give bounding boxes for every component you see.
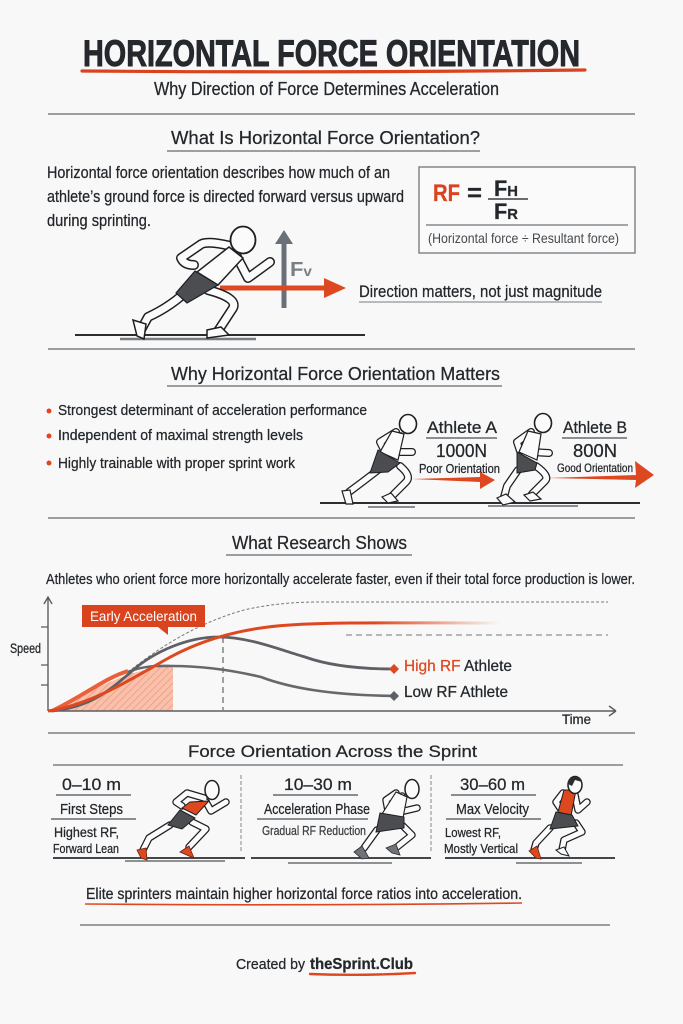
column: 10-30 m: Acceleration Phase (264, 801, 370, 818)
panel: why it matters (46, 363, 654, 507)
footer credit: Created by (236, 956, 305, 973)
runner: starting sprint (133, 226, 270, 339)
formula box: (Horizontal force ÷ Resultant force) (428, 230, 619, 246)
ground line (75, 335, 365, 339)
column: 10-30 m (251, 775, 431, 863)
chart axes (41, 597, 616, 716)
label: athlete A: 1000N (436, 441, 487, 461)
bullet list: Highly trainable with proper sprint work (58, 455, 295, 472)
column: 30-60 m: Mostly Vertical (444, 841, 518, 856)
legend: high RF athlete: High RF Athlete (404, 658, 512, 675)
heading: research: What Research Shows (232, 532, 407, 553)
column: 30-60 m (444, 775, 615, 863)
column: 30-60 m: Max Velocity (456, 801, 529, 818)
column: 0-10 m: Forward Lean (53, 842, 119, 856)
shaded area: early acceleration (52, 666, 173, 711)
marker: high RF (389, 664, 399, 674)
panel: what is horizontal force orientation (47, 127, 635, 339)
column: 0-10 m: Highest RF, (54, 824, 119, 840)
line chart: speed over time (10, 597, 616, 727)
label: athlete A: Poor Orientation (419, 462, 500, 476)
column: 30-60 m: 30–60 m (460, 775, 525, 794)
heading: what is: What Is Horizontal Force Orientation? (171, 127, 480, 148)
formula box: RF (433, 180, 460, 207)
ground line: athletes (320, 503, 640, 507)
formula box: FH (494, 176, 518, 201)
column: 10-30 m: 10–30 m (284, 775, 352, 794)
column: 0-10 m (51, 775, 245, 861)
column: 0-10 m: First Steps (60, 801, 123, 818)
callout: early acceleration (82, 605, 205, 635)
icon: athlete A force arrow (412, 472, 495, 489)
panel: research (10, 532, 635, 727)
label: athlete B: Athlete B (563, 418, 627, 437)
curve: high RF red (48, 623, 500, 711)
column: 30-60 m: Lowest RF, (445, 825, 501, 840)
text block: definition: during sprinting. (47, 212, 151, 230)
bullet list (46, 402, 367, 472)
icon: athlete B force arrow (548, 461, 654, 488)
formula box (419, 167, 635, 253)
column: 0-10 m: 0–10 m (62, 775, 121, 794)
legend: low RF athlete: Low RF Athlete (404, 684, 508, 701)
icon: vertical force arrow (275, 230, 312, 308)
runner: athlete B (497, 414, 552, 505)
label: athlete A (419, 418, 500, 476)
text block: definition: Horizontal force orientation describes how much of an (47, 164, 390, 182)
marker: low RF (389, 691, 399, 701)
icon: vertical force arrow: Fv (290, 259, 312, 281)
axis label: time: Time (562, 711, 591, 727)
runner: max velocity (529, 776, 587, 859)
runner: acceleration phase (354, 780, 419, 859)
formula box: = (467, 180, 482, 207)
curve: high RF gray (50, 637, 394, 711)
text block: definition (47, 164, 404, 230)
text block: definition: athlete’s ground force is directed forward versus upward (47, 188, 404, 206)
callout: early acceleration: Early Acceleration (90, 608, 197, 624)
statement: Elite sprinters maintain higher horizontal force ratios into acceleration. (86, 886, 522, 903)
subtitle: Why Direction of Force Determines Acceleration (154, 79, 499, 99)
heading: across the sprint: Force Orientation Across the Sprint (188, 742, 477, 761)
panel: force orientation across the sprint (51, 742, 623, 863)
runner: athlete A (342, 414, 416, 504)
curve: low RF (128, 666, 394, 696)
icon: horizontal force arrow (220, 278, 346, 298)
label: athlete A: Athlete A (427, 418, 498, 437)
callout: direction matters: Direction matters, not just magnitude (359, 283, 602, 301)
label: athlete B (557, 418, 633, 475)
label: athlete B: Good Orientation (557, 461, 633, 475)
runner: first steps (137, 780, 226, 860)
bullet list: Strongest determinant of acceleration performance (58, 402, 367, 419)
label: athlete B: 800N (573, 441, 617, 461)
formula box: FR (494, 199, 518, 224)
bullet list: Independent of maximal strength levels (58, 427, 303, 444)
footer credit: theSprint.Club (310, 956, 413, 973)
footer credit (236, 956, 415, 975)
column: 10-30 m: Gradual RF Reduction (262, 824, 366, 838)
axis label: speed: Speed (10, 640, 41, 656)
heading: why it matters: Why Horizontal Force Orientation Matters (171, 363, 500, 384)
